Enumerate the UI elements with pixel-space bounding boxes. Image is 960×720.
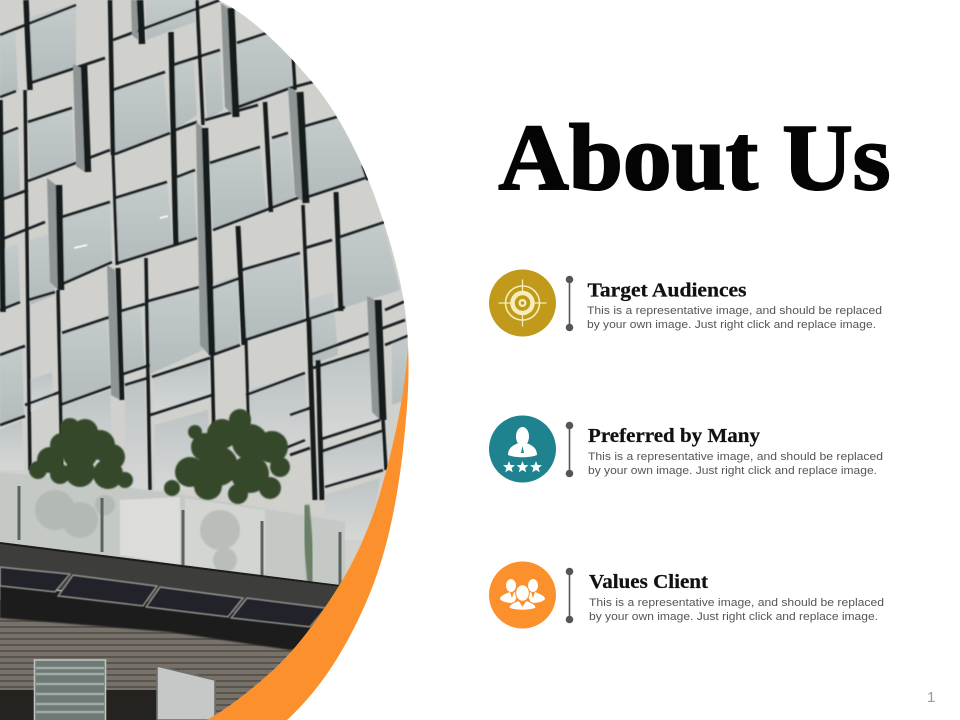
railing posts — [19, 486, 340, 585]
page number: 1 — [927, 689, 935, 706]
lower panes, brighter — [0, 348, 383, 540]
text block — [587, 305, 882, 331]
text block: by your own image. Just right click and replace image. — [587, 319, 876, 331]
solar panels — [0, 567, 326, 627]
title: About Us — [498, 106, 890, 210]
text block: by your own image. Just right click and replace image. — [588, 465, 877, 477]
heading: Target Audiences — [588, 280, 747, 302]
row: preferred by many — [489, 416, 883, 482]
row: values client — [489, 562, 884, 628]
text block: This is a representative image, and should be replaced — [587, 305, 882, 317]
text block: This is a representative image, and should be replaced — [588, 451, 883, 463]
slanted transoms — [0, 0, 410, 487]
connector — [566, 568, 573, 623]
orange swoosh — [207, 345, 409, 720]
panel: building photo — [0, 0, 420, 720]
icon: group of people — [489, 562, 556, 628]
heading: Values Client — [589, 572, 709, 593]
reflections — [74, 216, 168, 248]
dark band under solar panels — [0, 585, 345, 650]
balustrade glass — [0, 472, 345, 590]
lower facade siding — [0, 600, 345, 720]
glass panes — [0, 0, 408, 425]
vertical mullions — [0, 0, 386, 500]
bottom windows — [0, 690, 157, 720]
heading: Preferred by Many — [588, 426, 760, 447]
text block: by your own image. Just right click and replace image. — [589, 611, 878, 623]
text block: This is a representative image, and should be replaced — [589, 597, 884, 609]
light fin faces — [47, 0, 380, 420]
text block — [588, 451, 883, 477]
row: target audiences — [489, 270, 882, 336]
connector — [566, 276, 573, 331]
trees — [29, 409, 290, 504]
connector — [566, 422, 573, 477]
text block — [589, 597, 884, 623]
icon: person with stars — [489, 416, 556, 482]
tree reflections — [35, 490, 240, 572]
icon: target — [489, 270, 556, 336]
roof band — [0, 544, 338, 616]
